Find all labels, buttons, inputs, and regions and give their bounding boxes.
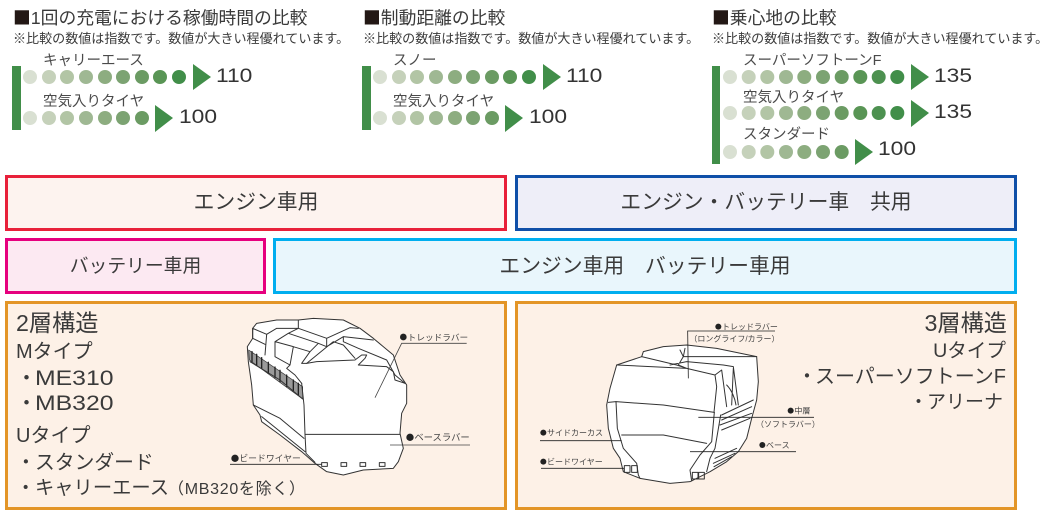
product list: U type: スタンダード [35,452,154,474]
value: 100: 100 [179,107,217,128]
callout: side carcass [540,429,622,441]
panel: ride comfort comparison [712,4,1048,160]
product list: U type [16,425,306,499]
callout: tread rubber: トレッドラバー [722,323,778,332]
value: 100: 100 [529,107,567,128]
product list: M type: ・ [16,367,37,390]
heading: three-layer structure: 3層構造 [925,310,1007,336]
value: 100: 100 [878,139,916,160]
panel: three-layer structure [515,301,1017,510]
callout: bead wire: ビードワイヤー [547,458,603,467]
note: braking: ※比較の数値は指数です。数値が大きい程優れています。 [363,31,699,46]
value: 110: 110 [566,66,602,87]
label: pneumatic tire: 空気入りタイヤ [43,94,144,110]
label: Standard: スタンダード [743,127,830,143]
callout: bead wire [230,454,322,464]
product list: U type: Uタイプ [933,340,1006,362]
legend box: engine vehicles [5,175,507,231]
callout: side carcass: サイドカーカス [547,429,603,438]
heading: braking: ■制動距離の比較 [363,4,505,30]
label: Snow: スノー [393,53,436,69]
chart: run time dots [12,64,211,132]
legend box: engine vehicles, battery vehicles: エンジン車用 バッテリー車用 [499,254,791,278]
callout: bead wire: ビードワイヤー [239,454,301,464]
legend box: battery vehicles [5,238,266,294]
legend box: engine and battery shared [515,175,1017,231]
product list: M type: ・ [16,392,37,415]
legend box: engine vehicles, battery vehicles [273,238,1017,294]
product list: M type: MB320 [35,392,114,415]
legend box: engine and battery shared: エンジン・バッテリー車 共用 [620,190,912,214]
callout: middle layer: 中層 [794,406,810,416]
product list: U type: Uタイプ [16,425,90,447]
product list: M type: Mタイプ [16,341,93,363]
product list: U type: ・ [16,478,35,499]
product list: U type: ・ [16,452,36,474]
value: 135 middle: 135 [934,102,972,123]
product list: U type: ・アリーナ [909,392,1003,413]
callout: middle layer [698,406,820,429]
panel: run time comparison [13,4,349,128]
diagram: three-layer tire cross section [540,323,820,484]
callout: tread rubber: トレッドラバー [408,332,468,342]
label: pneumatic tire: 空気入りタイヤ [743,90,844,106]
callout: base rubber [390,433,470,445]
diagram: two-layer tire cross section [230,318,470,476]
callout: base: ベース [766,441,790,450]
callout: tread rubber [375,332,468,398]
product list: U type: ・スーパーソフトーンF [797,366,1006,388]
product list: M type: ME310 [35,367,114,390]
note: run time: ※比較の数値は指数です。数値が大きい程優れています。 [13,31,349,46]
panel: braking distance comparison [363,4,699,128]
callout: tread rubber [688,323,780,378]
label: Super Soft Tone F: スーパーソフトーンF [743,53,882,69]
chart: ride comfort dots [712,64,929,165]
panel: two-layer structure [5,301,507,510]
product list: M type [16,341,114,415]
callout: base rubber: ベースラバー [414,433,470,443]
value: 135 top: 135 [934,66,972,87]
heading: run time: ■1回の充電における稼働時間の比較 [13,4,307,30]
product list: U type: キャリーエース（MB320を除く） [35,478,306,499]
chart: braking dots [362,64,561,132]
heading: ride comfort: ■乗心地の比較 [712,4,836,30]
value: 110: 110 [216,66,252,87]
callout: base [690,441,796,452]
heading: two-layer structure: 2層構造 [16,310,98,336]
label: Carry Ace: キャリーエース [43,53,144,69]
callout: middle layer: （ソフトラバー） [756,420,820,429]
callout: bead wire [540,458,624,468]
note: ride comfort: ※比較の数値は指数です。数値が大きい程優れています。 [712,31,1048,46]
label: pneumatic tire: 空気入りタイヤ [393,94,494,110]
legend box: battery vehicles: バッテリー車用 [70,255,201,276]
product list: U type [797,340,1006,413]
callout: tread rubber: （ロングライフ/カラー） [689,334,780,344]
legend box: engine vehicles: エンジン車用 [194,190,318,214]
